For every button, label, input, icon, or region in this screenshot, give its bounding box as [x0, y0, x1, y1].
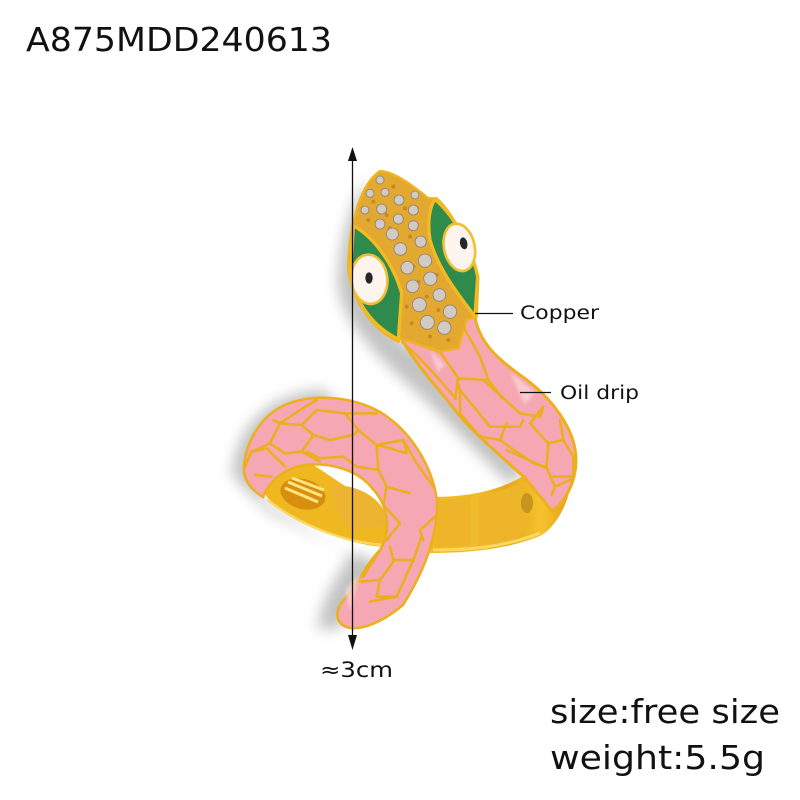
neck scale lines — [402, 327, 503, 400]
band bright edge — [433, 533, 540, 550]
ring band inner gloss — [437, 482, 531, 548]
specification text: size:free size — [550, 692, 780, 731]
specification text: weight:5.5g — [550, 738, 765, 777]
head gold base — [348, 171, 478, 352]
product code title: A875MDD240613 — [26, 20, 332, 59]
snake body left coil and tail — [244, 398, 437, 628]
right eye pupil — [459, 237, 468, 250]
left eye enamel — [351, 226, 402, 339]
ring open end detail — [277, 474, 329, 514]
callout: copper — [475, 303, 599, 324]
band inner highlight — [332, 484, 390, 530]
band notch — [521, 493, 533, 513]
callout: oil drip — [520, 383, 639, 404]
enamel gloss highlights — [345, 350, 535, 610]
snake head — [348, 171, 503, 400]
left eye white — [349, 253, 390, 306]
height dimension arrow — [348, 147, 357, 650]
specification text — [550, 692, 780, 777]
left eye pupil — [365, 272, 373, 284]
callout: oil drip: Oil drip — [560, 383, 639, 404]
ring illustration — [232, 171, 576, 630]
right eye enamel — [429, 199, 478, 317]
pebbled gold texture — [366, 185, 450, 342]
snake body right with neck — [401, 317, 576, 511]
band lower bright edge — [268, 500, 384, 545]
size label: ≈3cm — [320, 658, 393, 682]
rhinestones — [361, 176, 457, 334]
ring band right — [430, 476, 570, 553]
ring band left — [262, 464, 392, 547]
right eye white — [439, 221, 479, 274]
gold scale lines — [245, 380, 573, 602]
callout: copper: Copper — [520, 303, 599, 324]
drop shadows — [232, 180, 525, 630]
